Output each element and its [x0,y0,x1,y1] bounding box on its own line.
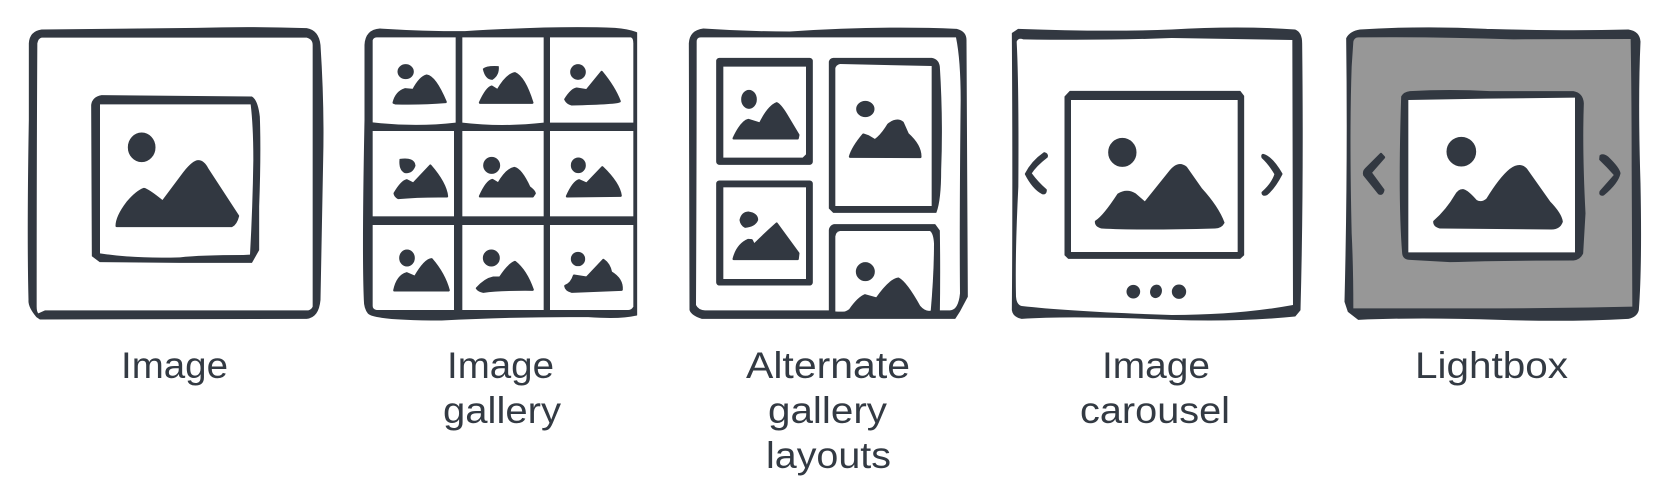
label: Alternate gallery layouts: layouts [766,435,891,476]
panel: Image gallery [363,28,637,431]
label: Alternate gallery layouts [746,345,910,476]
icon: single image in frame [28,28,323,319]
icon: masonry image layout [689,28,967,318]
panel: Image carousel [1012,28,1302,431]
label: Image carousel [1080,345,1230,431]
label: Image: Image [121,345,228,386]
icon: carousel with arrows and dots [1012,28,1302,320]
panel: Image [28,28,323,386]
label: Lightbox: Lightbox [1415,345,1569,386]
icon: lightbox over grey backdrop [1345,28,1641,320]
icon: nine-cell image grid [363,28,637,320]
panel: Alternate gallery layouts [689,28,967,476]
label: Image carousel: carousel [1080,390,1230,431]
label: Alternate gallery layouts: gallery [768,390,888,431]
label: Image gallery: Image [447,345,554,386]
label: Alternate gallery layouts: Alternate [746,345,910,386]
label: Image gallery [443,345,562,431]
label: Image gallery: gallery [443,390,562,431]
panel: Lightbox [1345,28,1641,386]
label: Image carousel: Image [1102,345,1210,386]
